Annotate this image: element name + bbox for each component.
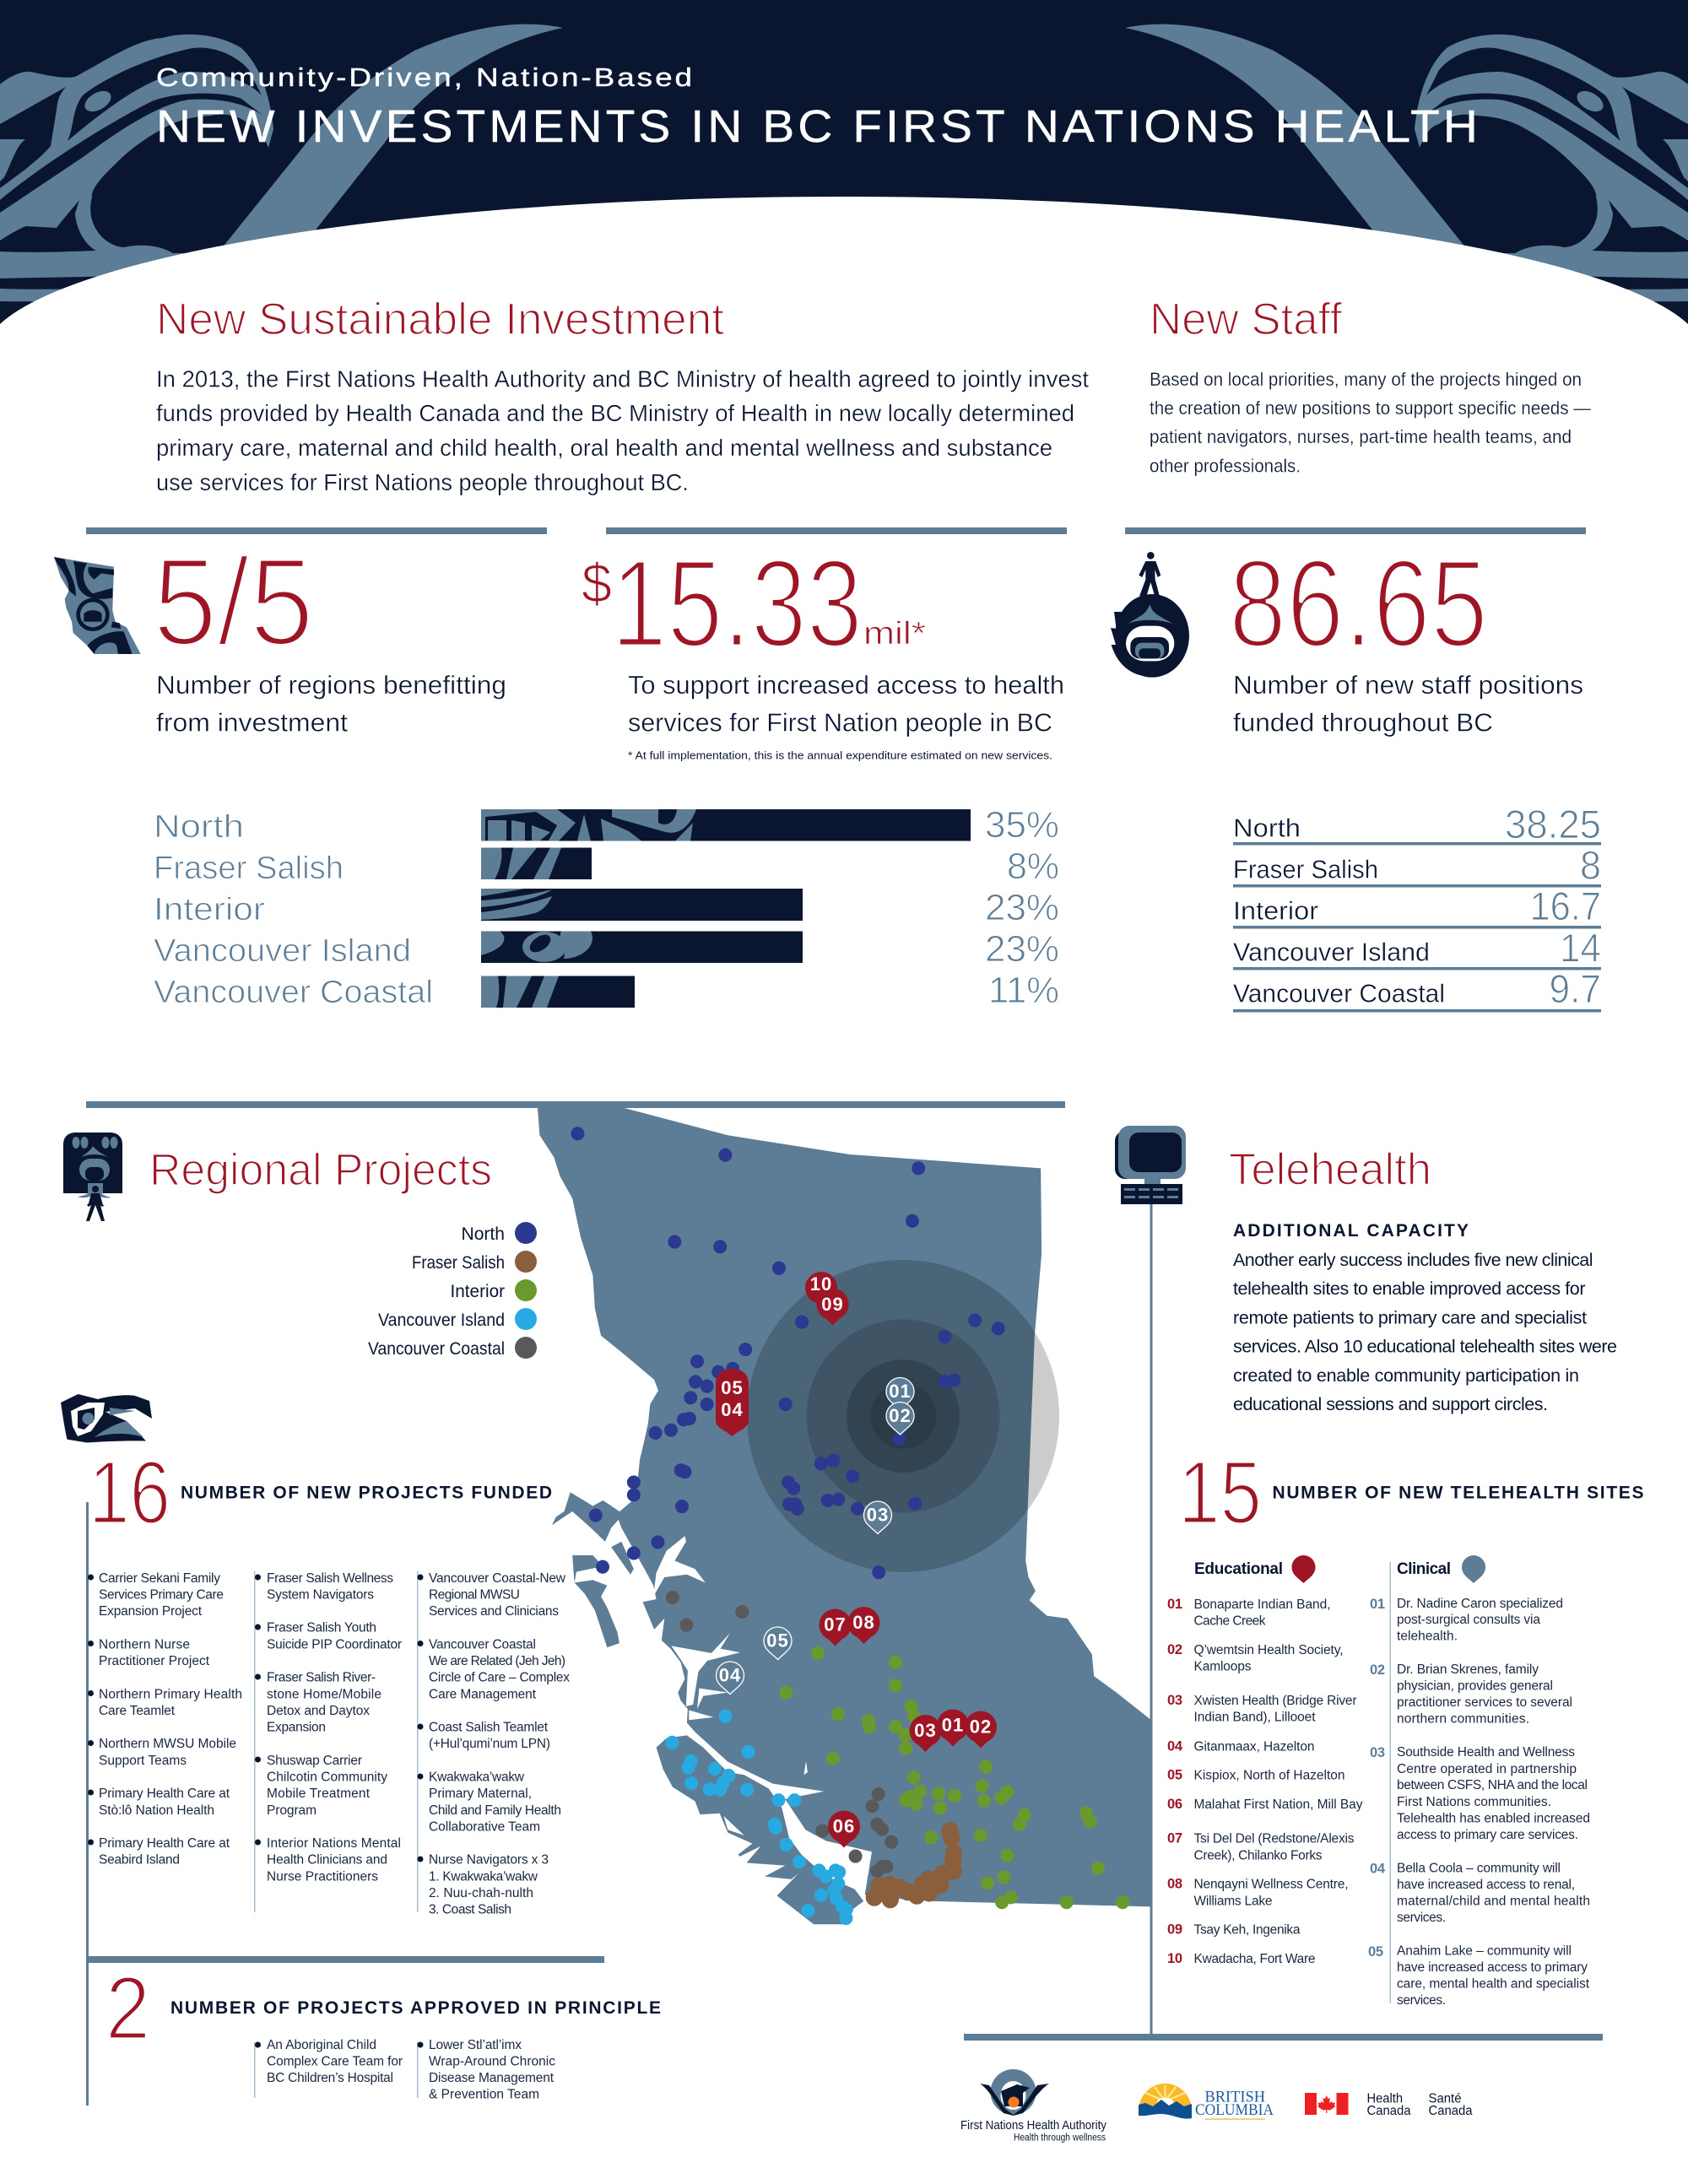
list: clinical telehealth sites: 02 — [1370, 1662, 1385, 1678]
list: educational telehealth sites: Bonaparte Indian Band, — [1193, 1597, 1330, 1612]
list: vancouver coastal and island projects: We are Related (Jeh Jeh) — [429, 1654, 565, 1668]
list: educational telehealth sites: Creek), Chilanko Forks — [1193, 1848, 1323, 1863]
list: vancouver coastal and island projects: Care Management — [429, 1688, 537, 1701]
right formline art — [1125, 24, 1688, 301]
list: educational telehealth sites: Tsi Del Del (Redstone/Alexis — [1193, 1831, 1355, 1846]
logo: british columbia: BRITISH — [1205, 2089, 1265, 2106]
logo: first nations health authority — [960, 2069, 1107, 2143]
list: vancouver coastal and island projects: Primary Maternal, — [429, 1787, 532, 1801]
pin: educational 02 — [965, 1711, 997, 1749]
bar: interior 23% — [481, 889, 803, 921]
stat: $15.33 million: $ — [582, 552, 612, 614]
table: staff positions by region: North — [1233, 814, 1301, 842]
title: NEW INVESTMENTS IN BC FIRST NATIONS HEALTH — [156, 101, 1481, 152]
table: staff positions by region: Fraser Salish — [1233, 854, 1378, 884]
vancouver coastal dots — [666, 1591, 898, 1878]
panel: new staff: the creation of new positions to support specific needs — — [1150, 397, 1591, 419]
vancouver island dots — [665, 1710, 853, 1925]
list: north projects: Seabird Island — [99, 1853, 180, 1867]
pin: educational 06 — [828, 1811, 860, 1848]
list: clinical telehealth sites: telehealth. — [1397, 1629, 1458, 1644]
list: north projects: Northern Nurse — [99, 1637, 190, 1652]
list: vancouver coastal and island projects: Child and Family Health — [429, 1803, 561, 1818]
text block: additional capacity: ADDITIONAL CAPACITY — [1233, 1221, 1469, 1241]
list: clinical telehealth sites: services. — [1397, 1911, 1446, 1925]
stat: 16 new projects funded: NUMBER OF NEW PROJECTS FUNDED — [181, 1484, 552, 1502]
region labels: Interior — [154, 892, 265, 927]
percent values: 35% — [985, 804, 1059, 846]
list: fraser salish and interior projects: Mobile Treatment — [267, 1787, 371, 1801]
list: educational telehealth sites: 02 — [1167, 1642, 1182, 1657]
interior dots — [779, 1646, 1129, 1909]
logo: first nations health authority: First Nations Health Authority — [960, 2119, 1107, 2133]
list: vancouver coastal and island projects: (+Hul’qumi’num LPN) — [429, 1737, 550, 1751]
map outline — [538, 1108, 1151, 1924]
list: educational telehealth sites: Tsay Keh, Ingenika — [1193, 1922, 1301, 1938]
stat: 86.65 staff positions — [1229, 534, 1583, 738]
icon: mask with figure — [63, 1133, 122, 1221]
heading: telehealth: Telehealth — [1229, 1144, 1431, 1195]
list: clinical telehealth sites: Anahim Lake – community will — [1397, 1944, 1572, 1958]
text block: additional capacity: created to enable community participation in — [1233, 1365, 1579, 1386]
list: clinical telehealth sites: Dr. Nadine Caron specialized — [1397, 1597, 1563, 1611]
list: fraser salish and interior projects: Nurse Practitioners — [267, 1870, 378, 1884]
list: clinical telehealth sites: practitioner services to several — [1397, 1695, 1572, 1710]
list: fraser salish and interior projects: Program — [267, 1803, 316, 1818]
text block: additional capacity: remote patients to primary care and specialist — [1233, 1308, 1587, 1328]
list: projects approved in principle: Lower Stl’atl’imx — [429, 2038, 522, 2052]
pin: clinical 02: 02 — [889, 1405, 912, 1426]
list: clinical telehealth sites: Telehealth has enabled increased — [1397, 1811, 1590, 1826]
list: north projects: Primary Health Care at — [99, 1787, 230, 1801]
pin: clinical 03 — [864, 1501, 891, 1534]
panel: new staff: other professionals. — [1150, 456, 1301, 476]
vancouver island — [657, 1735, 863, 1924]
list: vancouver coastal and island projects: 2. Nuu-chah-nulth — [429, 1886, 533, 1900]
title — [156, 62, 1481, 152]
list: clinical telehealth sites: 04 — [1370, 1862, 1386, 1877]
section rules — [86, 527, 1586, 534]
pins: educational 10 and 09 — [805, 1272, 849, 1325]
logo: health canada: Canada — [1428, 2104, 1473, 2118]
table: staff positions by region: 38.25 — [1505, 802, 1601, 846]
list: vancouver coastal and island projects: Coast Salish Teamlet — [429, 1720, 549, 1735]
list: educational telehealth sites: Kamloops — [1193, 1659, 1252, 1674]
list: educational telehealth sites: Kispiox, North of Hazelton — [1193, 1769, 1345, 1782]
icon: eagle head — [61, 1394, 152, 1443]
panel: new sustainable investment: funds provided by Health Canada and the BC Ministry of Health in new locally determined — [156, 400, 1074, 426]
map legend: Vancouver Coastal — [368, 1339, 505, 1359]
list: educational telehealth sites: Educational — [1194, 1560, 1283, 1578]
list: educational telehealth sites: Indian Band), Lillooet — [1193, 1710, 1316, 1725]
list: north projects: Carrier Sekani Family — [99, 1571, 220, 1586]
list: fraser salish and interior projects: Chilcotin Community — [267, 1770, 387, 1784]
pin: clinical 02 — [886, 1403, 914, 1435]
north dots — [571, 1127, 1005, 1579]
table: staff positions by region: Vancouver Island — [1233, 937, 1430, 967]
list: clinical telehealth sites: Southside Health and Wellness — [1397, 1745, 1575, 1760]
list: clinical telehealth sites: Dr. Brian Skrenes, family — [1397, 1662, 1539, 1677]
panel: new sustainable investment: New Sustainable Investment — [156, 295, 724, 344]
list: clinical telehealth sites: physician, provides general — [1397, 1679, 1553, 1693]
list: clinical telehealth sites: have increased access to renal, — [1397, 1878, 1575, 1892]
logo: health canada: Health — [1367, 2091, 1403, 2106]
stat: 86.65 staff positions: Number of new staff positions — [1233, 670, 1583, 700]
list: north projects: Northern MWSU Mobile — [99, 1737, 236, 1751]
list: clinical telehealth sites: care, mental health and specialist — [1397, 1976, 1590, 1992]
list: educational telehealth sites: 07 — [1167, 1831, 1182, 1846]
heading: regional projects: Regional Projects — [149, 1145, 492, 1195]
list: educational telehealth sites: 03 — [1167, 1693, 1182, 1708]
stat: 5/5 regions: 5/5 — [153, 532, 314, 672]
list: fraser salish and interior projects: System Navigators — [267, 1588, 374, 1602]
list: vancouver coastal and island projects: 1. Kwakwaka’wakw — [429, 1870, 538, 1884]
pin: clinical 03: 03 — [867, 1504, 889, 1526]
text block: additional capacity: educational sessions and support circles. — [1233, 1394, 1548, 1414]
list: clinical telehealth sites — [1368, 1555, 1590, 2008]
list: clinical telehealth sites: maternal/child and mental health — [1397, 1894, 1590, 1909]
list: projects approved in principle — [254, 2038, 555, 2101]
icon: red pin — [1291, 1555, 1315, 1583]
stat: 2 projects approved in principle: 2 — [106, 1959, 150, 2058]
list: fraser salish and interior projects: Detox and Daytox — [267, 1704, 370, 1718]
logo: health canada: Santé — [1428, 2091, 1462, 2106]
list: clinical telehealth sites: between CSFS, NHA and the local — [1397, 1778, 1588, 1792]
stat: 2 projects approved in principle — [86, 1956, 661, 2058]
pin: clinical 05: 05 — [766, 1630, 789, 1651]
list: vancouver coastal and island projects: Vancouver Coastal — [429, 1637, 536, 1652]
pin: educational 02: 02 — [970, 1716, 992, 1737]
pin: educational 05 and 04: 04 — [721, 1399, 744, 1420]
stat: 2 projects approved in principle: NUMBER OF PROJECTS APPROVED IN PRINCIPLE — [170, 1998, 661, 2018]
table: staff positions by region: Vancouver Coastal — [1233, 979, 1445, 1008]
list: north projects: Expansion Project — [99, 1604, 203, 1619]
list: projects approved in principle: An Aboriginal Child — [267, 2038, 376, 2052]
pin: educational 01 — [937, 1710, 969, 1747]
region labels: Fraser Salish — [154, 851, 344, 886]
panel: new sustainable investment: use services for First Nations people throughout BC. — [156, 469, 689, 495]
table: staff positions by region: 8 — [1580, 842, 1601, 888]
list: vancouver coastal and island projects: 3. Coast Salish — [429, 1902, 511, 1917]
list: vancouver coastal and island projects: Regional MWSU — [429, 1588, 520, 1602]
icon: telehealth computer — [1115, 1126, 1186, 1204]
stat: $15.33 million: services for First Nation people in BC — [628, 707, 1052, 738]
panel: new staff: Based on local priorities, many of the projects hinged on — [1150, 369, 1582, 390]
list: north projects: Support Teams — [99, 1754, 187, 1768]
icon: BC map with formline pattern — [54, 557, 141, 654]
stat: 15 new telehealth sites — [1178, 1443, 1644, 1543]
list: north projects: Stò:lô Nation Health — [99, 1803, 214, 1818]
region labels: Vancouver Coastal — [154, 975, 433, 1010]
map legend: Fraser Salish — [412, 1253, 505, 1273]
list: vancouver coastal and island projects: Circle of Care – Complex — [429, 1671, 570, 1684]
map of BC with project locations — [538, 1108, 1151, 1925]
list: clinical telehealth sites: services. — [1397, 1993, 1446, 2008]
left formline art — [0, 24, 563, 301]
list: north projects: Services Primary Care — [99, 1588, 224, 1602]
stat: $15.33 million: mil* — [863, 616, 926, 651]
pins: educational 10 and 09: 09 — [821, 1294, 844, 1315]
list: projects approved in principle: Wrap-Around Chronic — [429, 2054, 555, 2069]
list: educational telehealth sites: Q’wemtsin Health Society, — [1193, 1643, 1344, 1657]
list: vancouver coastal and island projects: Collaborative Team — [429, 1819, 540, 1835]
pins: educational 10 and 09: 10 — [810, 1273, 832, 1295]
list: educational telehealth sites: Malahat First Nation, Mill Bay — [1193, 1797, 1363, 1812]
list: educational telehealth sites: Gitanmaax, Hazelton — [1193, 1740, 1315, 1754]
stat: $15.33 million: 15.33 — [611, 534, 863, 673]
text block: additional capacity — [1233, 1221, 1617, 1414]
pin: educational 07 — [819, 1608, 851, 1646]
list: projects approved in principle: Disease Management — [429, 2071, 555, 2085]
list: north projects — [88, 1571, 242, 1867]
map legend — [368, 1222, 537, 1359]
table: staff positions by region: 9.7 — [1550, 966, 1601, 1011]
stat: 86.65 staff positions: 86.65 — [1229, 534, 1488, 673]
list: vancouver coastal and island projects: Kwakwaka’wakw — [429, 1770, 525, 1784]
table: staff positions by region: 14 — [1560, 925, 1601, 970]
pin: clinical 04: 04 — [719, 1664, 741, 1686]
percent values: 11% — [988, 970, 1059, 1011]
list: clinical telehealth sites: Bella Coola – community will — [1397, 1862, 1561, 1875]
map legend: North — [461, 1224, 505, 1244]
stat: $15.33 million: To support increased access to health — [628, 670, 1064, 700]
list: educational telehealth sites — [1167, 1555, 1363, 1966]
bar: north 35% — [481, 809, 971, 841]
list: clinical telehealth sites: northern communities. — [1397, 1711, 1529, 1727]
list: educational telehealth sites: Williams Lake — [1193, 1894, 1273, 1909]
logo: health canada — [1305, 2091, 1473, 2118]
list: projects approved in principle: Complex Care Team for — [267, 2054, 403, 2069]
footer rule — [964, 2034, 1603, 2041]
stat: 16 new projects funded — [86, 1443, 552, 2106]
panel: new sustainable investment — [156, 295, 1089, 495]
map legend: Vancouver Island — [378, 1311, 505, 1330]
list: clinical telehealth sites: Clinical — [1397, 1560, 1451, 1578]
list: vancouver coastal and island projects: Services and Clinicians — [429, 1604, 559, 1619]
logo: british columbia — [1139, 2084, 1274, 2120]
fraser salish dots — [866, 1822, 962, 1908]
list: fraser salish and interior projects: Shuswap Carrier — [267, 1754, 362, 1768]
list: educational telehealth sites: Nenqayni Wellness Centre, — [1193, 1877, 1349, 1892]
list: clinical telehealth sites: access to primary care services. — [1397, 1828, 1578, 1842]
list: fraser salish and interior projects: stone Home/Mobile — [267, 1688, 381, 1701]
list: clinical telehealth sites: Centre operated in partnership — [1397, 1762, 1577, 1776]
stat: 16 new projects funded: 16 — [89, 1443, 170, 1543]
list: fraser salish and interior projects: Expansion — [267, 1720, 326, 1735]
pin: educational 03: 03 — [914, 1720, 937, 1741]
table: staff positions by region: Interior — [1233, 896, 1318, 925]
region labels: Vancouver Island — [154, 933, 411, 969]
logo: first nations health authority: Health through wellness — [1014, 2133, 1106, 2143]
list: north projects: Primary Health Care at — [99, 1836, 230, 1851]
pin: clinical 05 — [764, 1627, 792, 1659]
list: educational telehealth sites: 04 — [1167, 1738, 1183, 1754]
panel: new staff: patient navigators, nurses, part-time health teams, and — [1150, 426, 1572, 447]
stat: 5/5 regions: from investment — [156, 707, 348, 738]
list: educational telehealth sites: 10 — [1167, 1951, 1182, 1966]
list: clinical telehealth sites: 01 — [1370, 1597, 1385, 1612]
table: staff positions by region: 16.7 — [1529, 884, 1601, 928]
list: fraser salish and interior projects: Fraser Salish Youth — [267, 1620, 376, 1635]
stat: $15.33 million — [582, 534, 1064, 761]
text block: additional capacity: Another early success includes five new clinical — [1233, 1250, 1593, 1270]
map legend: Interior — [451, 1282, 505, 1301]
icon: steel pin — [1462, 1555, 1485, 1583]
header banner with formline art — [0, 0, 1688, 514]
bar: vancouver coastal 11% — [481, 976, 635, 1008]
pin: educational 05 and 04: 05 — [721, 1377, 744, 1398]
bar: vancouver island 23% — [481, 931, 803, 963]
pin: educational 03 — [910, 1715, 942, 1752]
list: educational telehealth sites: 08 — [1167, 1877, 1182, 1892]
list: educational telehealth sites: 06 — [1167, 1797, 1182, 1812]
stat: 5/5 regions — [153, 532, 506, 738]
list: north projects: Care Teamlet — [99, 1704, 176, 1718]
list: educational telehealth sites: Xwisten Health (Bridge River — [1193, 1694, 1357, 1708]
fjords — [653, 1536, 808, 1775]
panel: new staff: New Staff — [1150, 295, 1342, 344]
pin: educational 06: 06 — [833, 1816, 855, 1836]
stat: 15 new telehealth sites: 15 — [1178, 1443, 1262, 1543]
region labels: North — [154, 809, 244, 845]
list: clinical telehealth sites: 03 — [1370, 1745, 1385, 1760]
text block: additional capacity: telehealth sites to enable improved access for — [1233, 1279, 1585, 1299]
icon: figure standing on mask — [1111, 552, 1189, 678]
list: educational telehealth sites: Cache Creek — [1193, 1614, 1266, 1629]
list: fraser salish and interior projects: Fraser Salish Wellness — [267, 1571, 393, 1586]
panel: new sustainable investment: primary care, maternal and child health, oral health and mental wellness and substance — [156, 435, 1052, 461]
list: fraser salish and interior projects: Suicide PIP Coordinator — [267, 1637, 402, 1652]
percent values — [985, 804, 1059, 1011]
list: educational telehealth sites: Kwadacha, Fort Ware — [1193, 1952, 1315, 1966]
percent values: 8% — [1007, 846, 1059, 887]
list: educational telehealth sites: 05 — [1167, 1767, 1182, 1782]
pin: educational 01: 01 — [942, 1715, 964, 1735]
distance circles — [747, 1260, 1059, 1572]
panel: new sustainable investment: In 2013, the First Nations Health Authority and BC Ministry of health agreed to jointly invest — [156, 366, 1089, 392]
pin: clinical 01: 01 — [889, 1381, 912, 1402]
list: projects approved in principle: & Prevention Team — [429, 2088, 539, 2101]
title: Community-Driven, Nation-Based — [156, 62, 695, 92]
table: staff positions by region — [1233, 802, 1601, 1013]
percent values: 23% — [985, 928, 1059, 970]
list: projects approved in principle: BC Children’s Hospital — [267, 2071, 393, 2085]
list: clinical telehealth sites: First Nations communities. — [1397, 1795, 1551, 1809]
list: vancouver coastal and island projects: Nurse Navigators x 3 — [429, 1853, 549, 1867]
pin: clinical 01 — [886, 1377, 914, 1410]
list: educational telehealth sites: 09 — [1167, 1922, 1182, 1938]
list: north projects: Northern Primary Health — [99, 1688, 242, 1701]
pin: educational 05 and 04 — [716, 1369, 749, 1436]
pin: clinical 04 — [716, 1662, 744, 1695]
panel: new staff — [1150, 295, 1591, 476]
text block: additional capacity: services. Also 10 educational telehealth sites were — [1233, 1337, 1617, 1357]
list: clinical telehealth sites: post-surgical consults via — [1397, 1613, 1540, 1627]
haida gwaii — [552, 1492, 634, 1647]
pin: educational 08: 08 — [852, 1612, 875, 1633]
list: clinical telehealth sites: 05 — [1368, 1944, 1383, 1960]
list: fraser salish and interior projects — [254, 1571, 402, 1912]
logo: health canada: Canada — [1367, 2104, 1411, 2118]
stat: 5/5 regions: Number of regions benefitting — [156, 670, 506, 700]
pin: educational 08 — [847, 1607, 879, 1644]
list: fraser salish and interior projects: Interior Nations Mental — [267, 1836, 401, 1851]
list: clinical telehealth sites: have increased access to primary — [1397, 1960, 1588, 1975]
telehealth connector line — [1150, 1204, 1153, 2035]
list: vancouver coastal and island projects — [417, 1571, 570, 1917]
list: educational telehealth sites: 01 — [1167, 1597, 1182, 1612]
percent values: 23% — [985, 887, 1059, 928]
logo: british columbia: COLUMBIA — [1195, 2102, 1274, 2119]
stat: $15.33 million: * At full implementation, this is the annual expenditure estimated on new services. — [628, 749, 1052, 761]
bar chart: investment by region — [154, 804, 1059, 1011]
region labels — [154, 809, 433, 1010]
regional projects rule — [86, 1101, 1065, 1108]
pin: educational 07: 07 — [824, 1614, 847, 1635]
bar: fraser salish 8% — [481, 847, 592, 879]
list: vancouver coastal and island projects: Vancouver Coastal-New — [429, 1571, 566, 1586]
stat: 15 new telehealth sites: NUMBER OF NEW TELEHEALTH SITES — [1273, 1484, 1644, 1502]
stat: 86.65 staff positions: funded throughout BC — [1233, 707, 1493, 738]
list: north projects: Practitioner Project — [99, 1654, 210, 1668]
list: fraser salish and interior projects: Health Clinicians and — [267, 1853, 387, 1867]
list: fraser salish and interior projects: Fraser Salish River- — [267, 1671, 376, 1684]
